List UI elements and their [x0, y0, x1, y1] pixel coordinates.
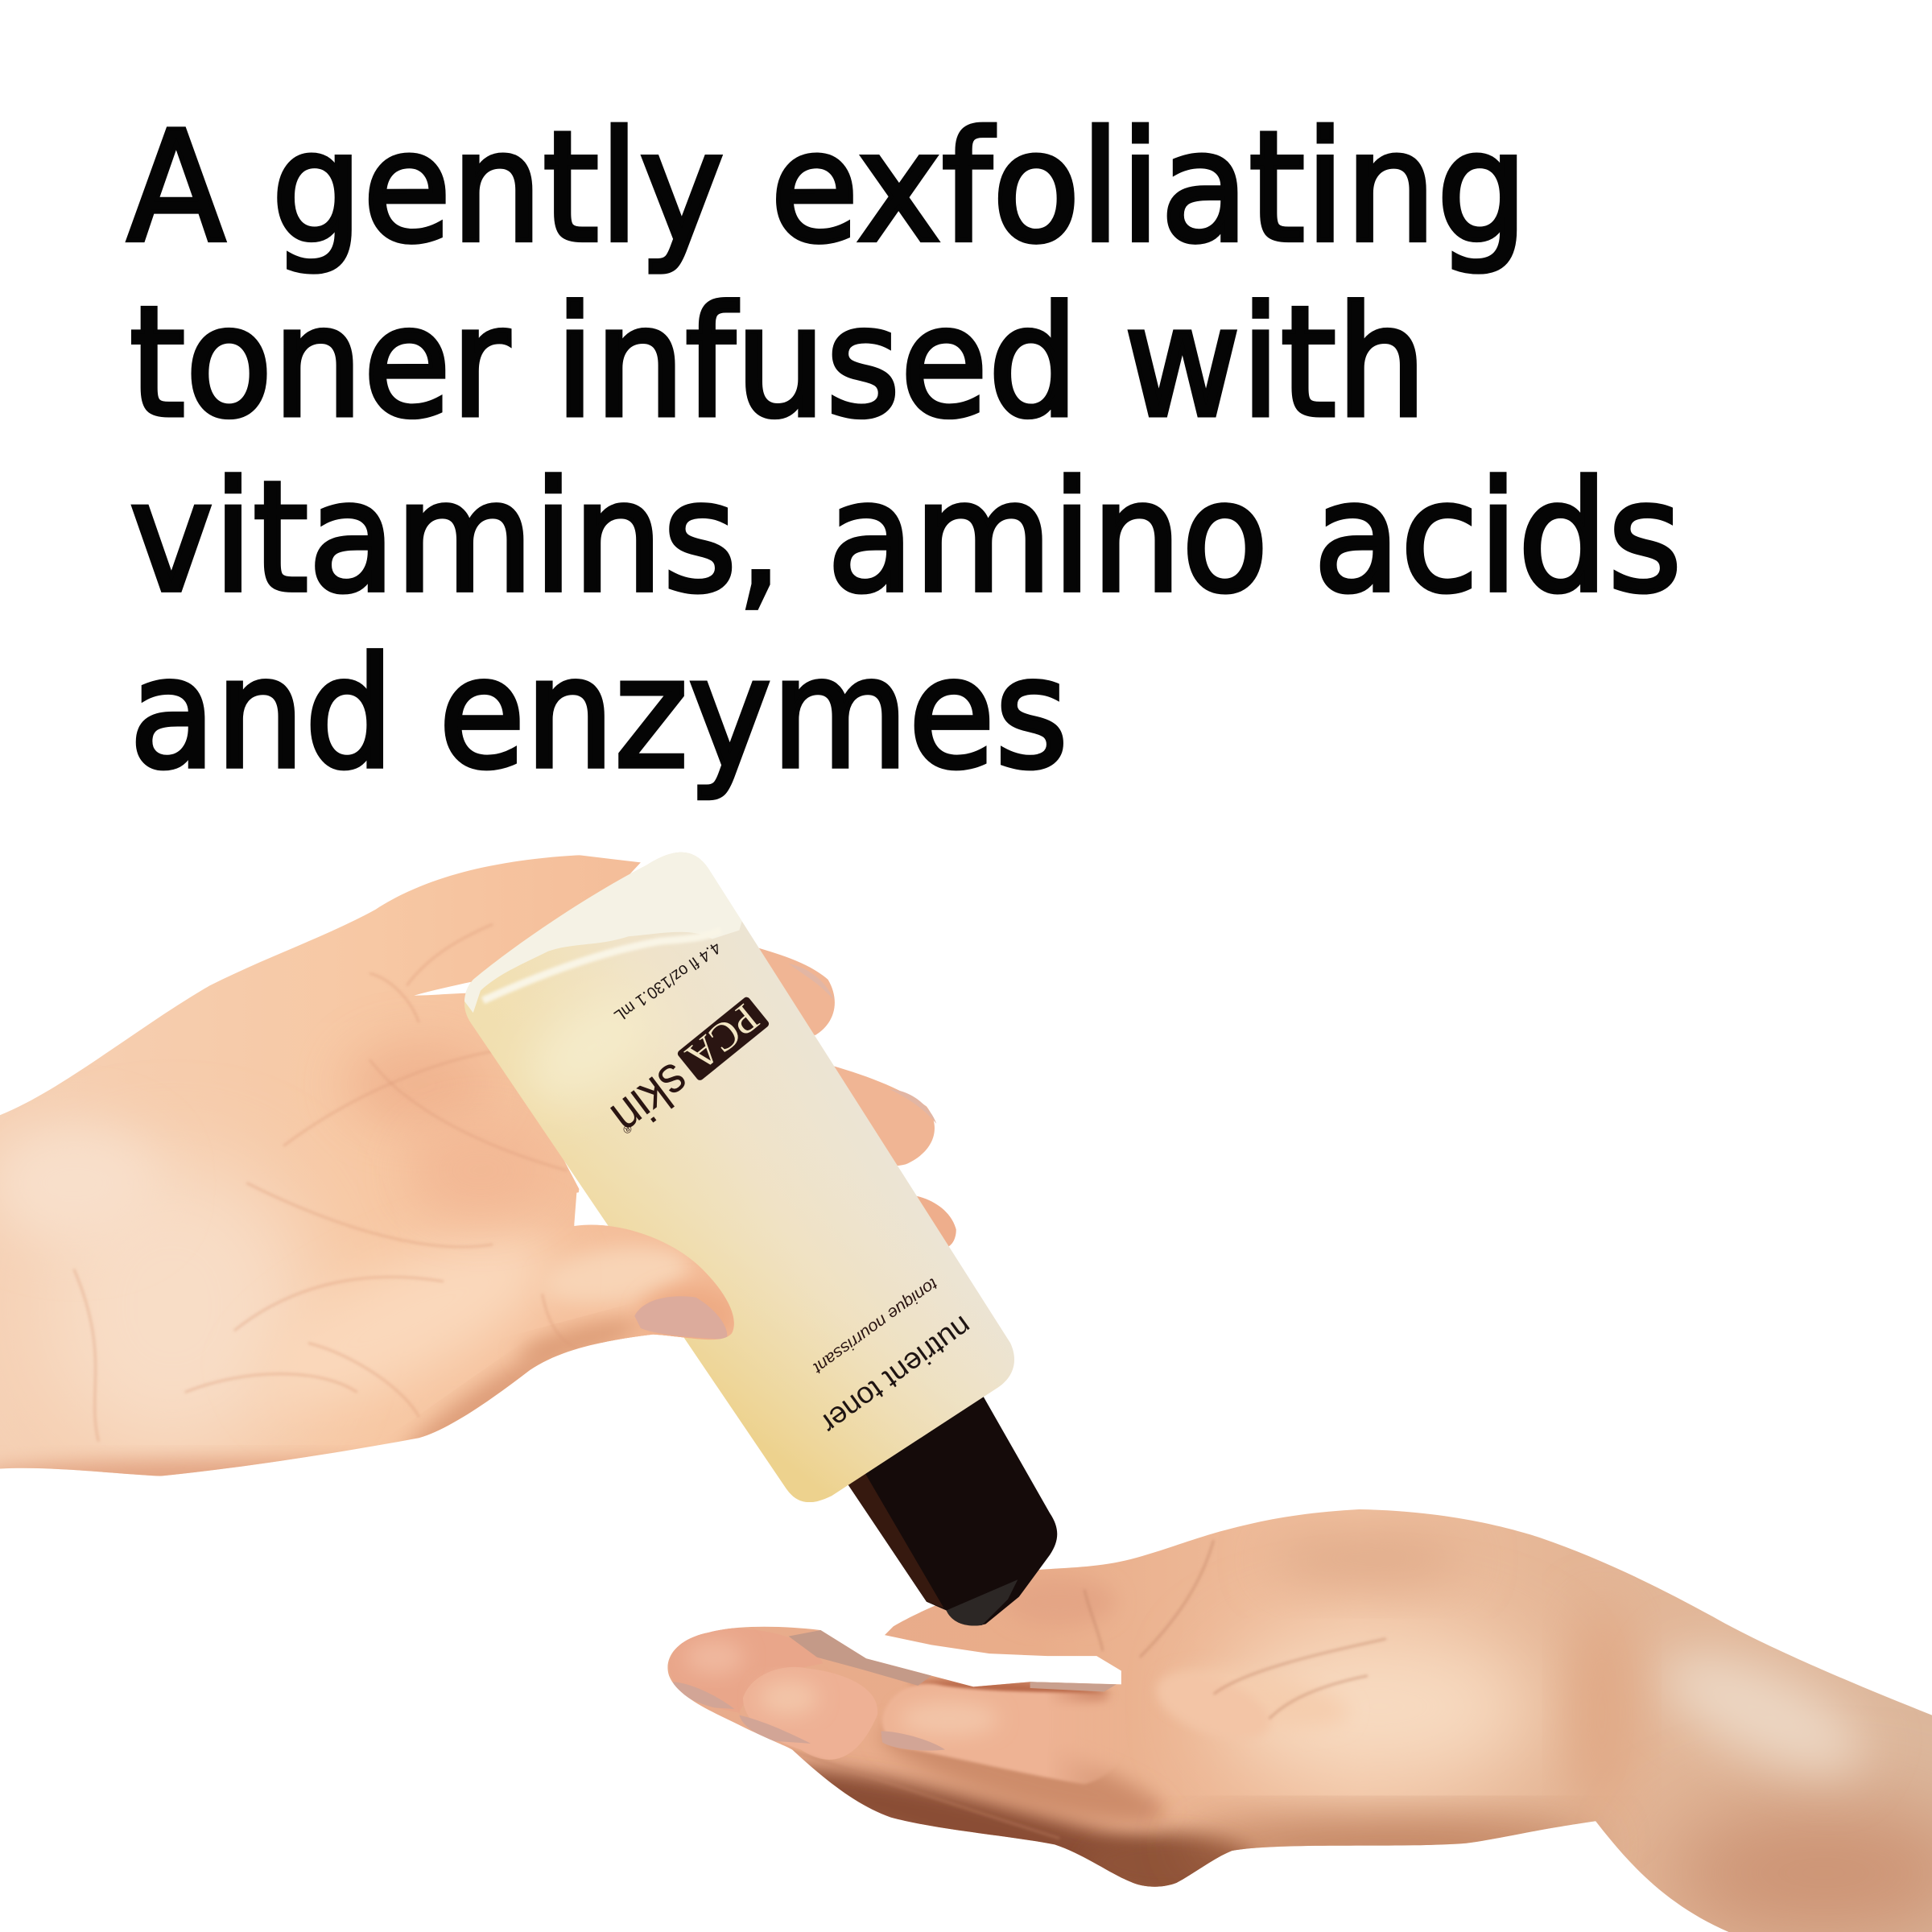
- fingernails: [673, 1682, 945, 1751]
- palm creases: [74, 924, 579, 1442]
- foam at top of bottle: [444, 826, 770, 1013]
- bottle label: PCA logo: PCA: [678, 996, 767, 1080]
- title: vitamins, amino acids: [130, 448, 1682, 626]
- lower hand shading: [752, 1532, 1932, 1932]
- bottle label: skin: skin: [601, 1052, 701, 1147]
- finger sliver under foam: [789, 1630, 931, 1686]
- title: toner infused with: [130, 274, 1426, 452]
- upper hand: palm: [0, 855, 683, 1476]
- bottle label: nutrient toner: nutrient toner: [815, 1310, 978, 1440]
- upper hand: thumb over bottle: [0, 838, 764, 1493]
- lower hand: [653, 1491, 1932, 1932]
- hand creases: [789, 1540, 1386, 1839]
- bottle label: tonique nourrissant: tonique nourrissant: [809, 1274, 941, 1377]
- palm sliver under foam: [1030, 1682, 1117, 1692]
- bottle: [444, 826, 1035, 1516]
- thumbnail: [634, 1296, 727, 1340]
- bottle label: registered mark: ®: [621, 1122, 634, 1137]
- title: A gently exfoliating: [127, 98, 1528, 276]
- finger tips: [669, 1628, 1278, 1784]
- upper hand: back fingers: [739, 943, 956, 1248]
- title: and enzymes: [130, 625, 1068, 803]
- bottle cap: [844, 1390, 1057, 1626]
- white gaps between hand and bottle: [414, 982, 609, 1224]
- bottle label: volume: 4.4 fl oz/130.1 mL: [611, 938, 724, 1026]
- title: [127, 98, 1682, 803]
